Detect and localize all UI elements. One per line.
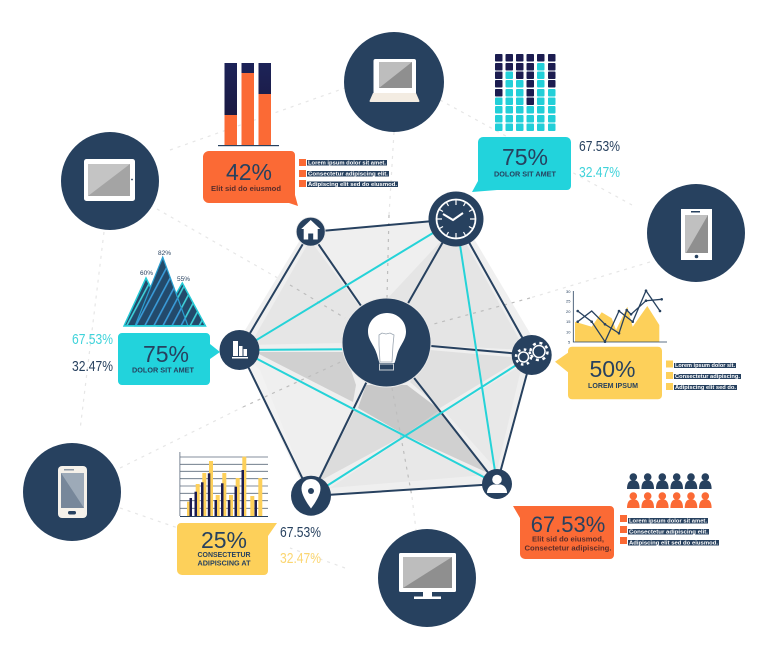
panel: orange 67.53% people chart xyxy=(513,473,719,559)
line chart: 15 xyxy=(566,319,571,324)
legend xyxy=(666,360,741,391)
panel: orange 42% bar chart xyxy=(203,63,398,206)
hub: light bulb xyxy=(342,298,431,387)
node: clock xyxy=(428,192,484,246)
percentages: 32.47% xyxy=(579,164,620,181)
line chart: 30 xyxy=(566,289,571,294)
dotted lines over the hub xyxy=(243,215,530,497)
legend: Adipiscing elit sed do eiusmod. xyxy=(308,182,398,188)
mountain chart xyxy=(124,250,206,326)
legend: Adipiscing elit sed do eiusmod. xyxy=(629,540,719,546)
line chart: 5 xyxy=(568,340,571,344)
cyan callout xyxy=(472,137,571,192)
legend: Lorem ipsum dolor sit. xyxy=(675,363,736,369)
legend: Lorem ipsum dolor sit amet. xyxy=(308,160,387,166)
legend: Consectetur adipiscing elit. xyxy=(629,530,709,536)
yellow callout: ADIPISCING AT xyxy=(198,560,251,568)
device circle: smartphone right xyxy=(647,184,745,282)
yellow callout: 50% xyxy=(589,356,636,382)
line chart: 25 xyxy=(566,298,571,304)
orange callout: 67.53% xyxy=(531,512,605,537)
legend: Consectetur adipiscing. xyxy=(675,374,741,380)
node: bar chart xyxy=(220,330,260,370)
device circle: laptop xyxy=(344,32,444,132)
percentages: 32.47% xyxy=(72,358,113,375)
percentages: 67.53% xyxy=(579,138,620,155)
orange callout: 42% xyxy=(226,159,272,185)
percentages: 67.53% xyxy=(280,524,321,541)
orange callout: Elit sid do eiusmod xyxy=(211,186,281,193)
node: home xyxy=(296,217,325,246)
cyan callout xyxy=(118,333,220,385)
mountain chart: 60% xyxy=(140,270,153,277)
node: gears xyxy=(512,335,552,375)
legend: Consectetur adipiscing elit. xyxy=(308,172,389,178)
legend: Lorem ipsum dolor sit amet. xyxy=(629,518,708,524)
grouped bar chart xyxy=(180,452,268,517)
people pictogram xyxy=(627,473,712,508)
line chart: 20 xyxy=(566,309,571,314)
orange callout xyxy=(203,151,298,206)
percentages: 32.47% xyxy=(280,550,321,567)
network connector lines xyxy=(240,219,532,496)
mountain chart: 55% xyxy=(177,276,190,283)
orange callout: Consectetur adipiscing. xyxy=(524,546,612,552)
percentages xyxy=(280,524,321,567)
stacked bar chart xyxy=(218,63,279,146)
orange callout xyxy=(513,506,614,559)
panel: yellow 25% bar chart xyxy=(177,452,321,575)
cyan callout: DOLOR SIT AMET xyxy=(494,172,557,178)
mountain chart: 82% xyxy=(158,250,171,257)
yellow callout: LOREM IPSUM xyxy=(588,383,638,390)
cyan callout: 75% xyxy=(502,144,548,170)
legend xyxy=(620,515,719,546)
device circle: tablet xyxy=(61,132,159,230)
yellow callout: 25% xyxy=(201,527,247,553)
waffle chart xyxy=(495,54,556,131)
panel: yellow 50% line chart xyxy=(555,289,741,399)
orange callout: Elit sid do eiusmod, xyxy=(532,536,604,544)
percentages xyxy=(72,331,113,375)
line chart: 10 xyxy=(566,330,571,334)
yellow callout xyxy=(555,347,662,399)
yellow callout: CONSECTETUR xyxy=(198,552,250,559)
cyan callout: DOLOR SIT AMET xyxy=(132,368,195,374)
legend xyxy=(299,159,398,188)
cyan callout: 75% xyxy=(143,341,189,367)
device circle: monitor xyxy=(378,529,476,627)
percentages xyxy=(579,138,620,181)
line chart xyxy=(566,289,667,344)
device circle: smartphone left xyxy=(23,443,121,541)
dotted background connections xyxy=(80,88,650,568)
yellow callout xyxy=(177,523,277,575)
panel: cyan 75% mountain chart xyxy=(72,250,220,385)
node: location pin xyxy=(291,476,331,516)
node: user xyxy=(482,469,512,499)
legend: Adipiscing elit sed do. xyxy=(675,385,737,391)
central gray facets xyxy=(236,219,540,496)
panel: cyan 75% waffle chart xyxy=(472,54,620,192)
percentages: 67.53% xyxy=(72,331,113,348)
